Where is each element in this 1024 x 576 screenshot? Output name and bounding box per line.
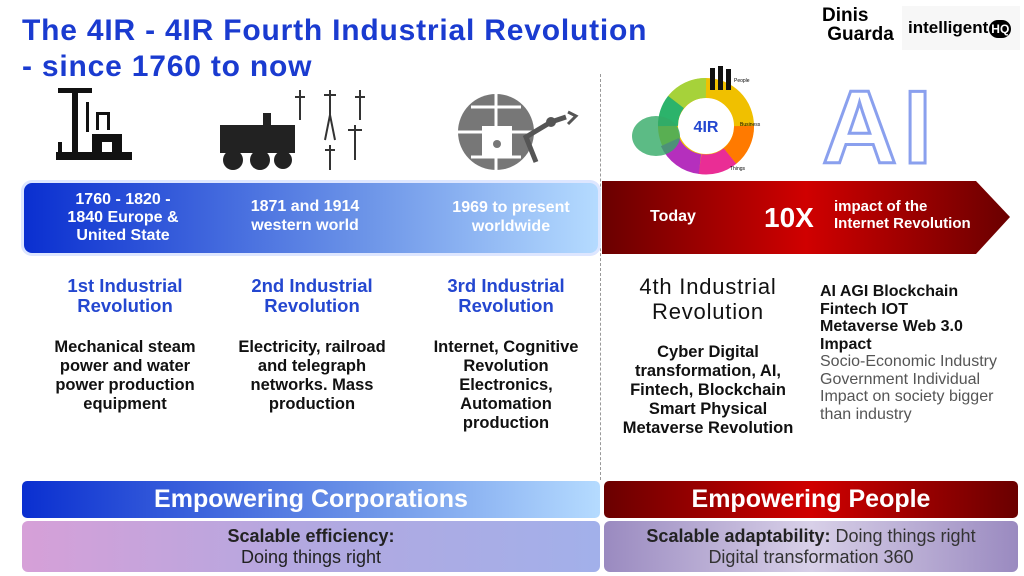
desc 2: production <box>269 395 355 413</box>
logo: intelligentHQ: HQ <box>991 22 1009 36</box>
date 3: worldwide <box>472 218 550 235</box>
logo: intelligentHQ <box>902 6 1020 50</box>
desc 1 <box>54 338 196 413</box>
date 2: western world <box>251 217 359 234</box>
date 1: 1840 Europe & <box>67 209 179 226</box>
desc 1: power production <box>55 376 195 394</box>
panel: scalable efficiency: Scalable efficiency: <box>227 526 395 546</box>
desc 1: power and water <box>60 357 190 375</box>
icon: globe and robot arm <box>458 94 578 170</box>
desc 4 <box>623 343 793 437</box>
timeline arrow: red: impact of the <box>834 198 927 215</box>
desc 1: equipment <box>83 395 167 413</box>
heading: 3rd <box>447 275 565 316</box>
timeline arrow: red <box>602 181 1010 254</box>
heading: 1st <box>67 275 183 316</box>
logo: intelligentHQ: intelligent <box>908 18 988 37</box>
heading: 2nd <box>251 275 373 316</box>
desc 4: Metaverse Revolution <box>623 419 793 437</box>
banner: Empowering Corporations <box>22 481 600 518</box>
heading: 4th <box>639 274 777 324</box>
logo: Dinis Guarda: Dinis <box>822 5 868 26</box>
heading: 2nd: Revolution <box>264 295 360 316</box>
heading: 2nd: 2nd Industrial <box>251 275 373 296</box>
date 1: United State <box>76 227 170 244</box>
right column text: Metaverse Web 3.0 <box>820 318 963 335</box>
desc 2: and telegraph <box>258 357 366 375</box>
right column text: Fintech IOT <box>820 300 908 318</box>
right column text: than industry <box>820 406 912 422</box>
panel: scalable adaptability: Digital transformation 360 <box>708 547 914 567</box>
panel: scalable efficiency: Doing things right <box>241 547 381 567</box>
desc 3: Electronics, <box>459 376 553 394</box>
heading: 4th: Revolution <box>652 299 764 324</box>
timeline bar: blue <box>24 183 598 253</box>
title: - since 1760 to now <box>22 50 312 83</box>
right column text: Government Individual <box>820 370 980 388</box>
date 3 <box>452 199 570 235</box>
right column text: Impact <box>820 336 872 352</box>
icon: steam engine <box>56 88 132 160</box>
date 1 <box>67 191 179 244</box>
date 3: 1969 to present <box>452 199 570 216</box>
heading: 1st: Revolution <box>77 295 173 316</box>
desc 3: Automation <box>460 395 552 413</box>
right column text: AI AGI Blockchain <box>820 283 958 300</box>
desc 4: transformation, AI, <box>635 362 781 380</box>
title <box>22 14 647 83</box>
logo: Dinis Guarda: Guarda <box>827 24 894 45</box>
heading: 3rd: 3rd Industrial <box>447 275 565 296</box>
desc 3: Internet, Cognitive <box>434 338 578 356</box>
heading: 3rd: Revolution <box>458 295 554 316</box>
desc 4: Smart Physical <box>649 400 767 418</box>
title: The 4IR - 4IR Fourth Industrial Revolution <box>22 14 647 47</box>
timeline arrow: red: 10X <box>764 202 814 233</box>
divider <box>600 74 601 480</box>
desc 4: Cyber Digital <box>657 343 759 361</box>
panel: scalable efficiency <box>22 521 600 572</box>
right column text: Impact on society bigger <box>820 388 993 405</box>
icon: 4IR wheel: Things <box>730 166 746 172</box>
date 2 <box>251 198 360 234</box>
date 2: 1871 and 1914 <box>251 198 359 215</box>
heading: 4th: 4th Industrial <box>639 274 777 299</box>
desc 3 <box>434 338 578 432</box>
desc 3: Revolution <box>463 357 549 375</box>
icon: train and pylons <box>220 90 365 170</box>
date 1: 1760 - 1820 - <box>75 191 171 208</box>
icon: AI circuit letters: AI <box>822 70 938 186</box>
desc 2 <box>238 338 386 413</box>
desc 2: Electricity, railroad <box>238 338 386 356</box>
icon: 4IR wheel: 4IR <box>694 119 719 136</box>
banner: Empowering Corporations: Empowering Corporations <box>154 485 468 513</box>
timeline arrow: red: Internet Revolution <box>834 215 971 232</box>
timeline arrow: red: Today <box>650 208 696 225</box>
panel: scalable adaptability: Scalable adaptability: Doing things right <box>646 526 976 546</box>
icon: 4IR wheel: People <box>734 78 750 84</box>
panel: scalable adaptability <box>604 521 1018 572</box>
banner: Empowering People: Empowering People <box>692 485 930 513</box>
icon: 4IR wheel: Business <box>740 122 761 128</box>
desc 1: Mechanical steam <box>54 338 196 356</box>
heading: 1st: 1st Industrial <box>67 275 183 296</box>
desc 4: Fintech, Blockchain <box>630 381 786 399</box>
icon: 4IR wheel <box>632 66 761 174</box>
banner: Empowering People <box>604 481 1018 518</box>
desc 3: production <box>463 414 549 432</box>
right column text <box>820 283 997 422</box>
desc 2: networks. Mass <box>251 376 373 394</box>
logo: Dinis Guarda <box>822 5 894 45</box>
right column text: Socio-Economic Industry <box>820 353 997 370</box>
